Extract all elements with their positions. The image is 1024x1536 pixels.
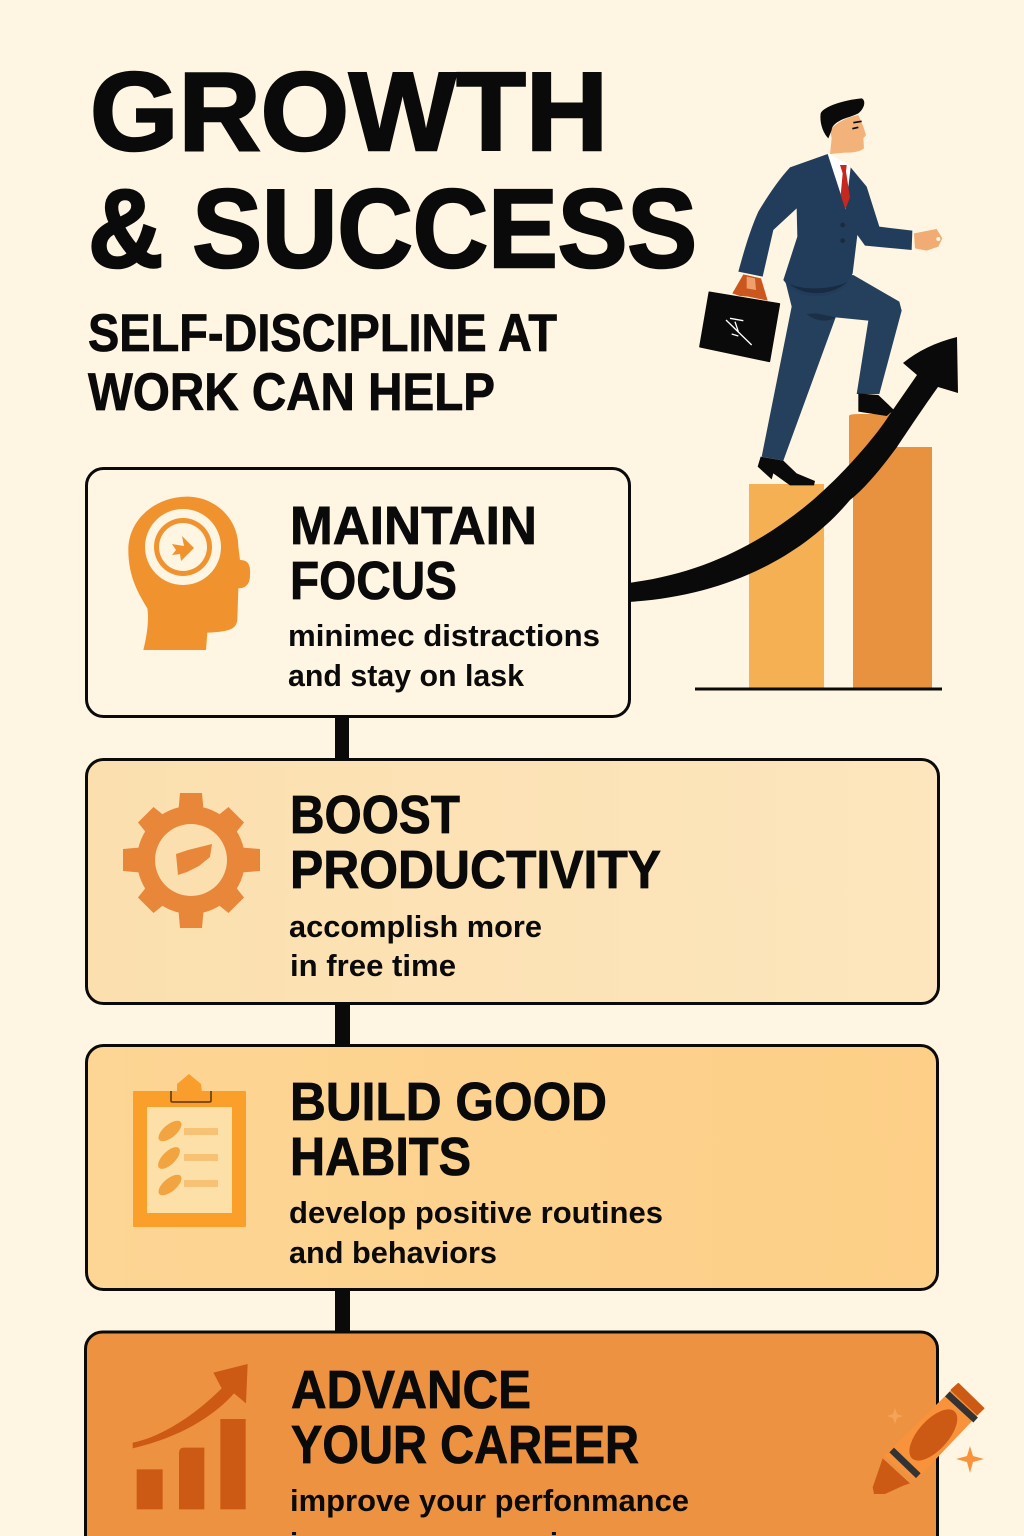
man: legs <box>762 275 902 461</box>
heading: YOUR CAREER <box>291 1415 639 1475</box>
heading: HABITS <box>290 1127 471 1187</box>
man: hand on briefcase <box>732 274 768 301</box>
panel: maintain focus <box>86 468 630 716</box>
icon: gear <box>100 769 282 951</box>
panel: boost productivity <box>86 760 938 1004</box>
description <box>289 1195 663 1270</box>
description: in free time <box>290 948 456 983</box>
illustration: businessman climbing <box>700 98 942 485</box>
description <box>289 909 542 983</box>
title: GROWTH <box>90 50 608 174</box>
heading <box>290 785 661 900</box>
man: hair <box>820 98 864 138</box>
connector lines between panels <box>335 715 350 1333</box>
icon: crayon with sparkles <box>873 1384 984 1494</box>
heading: MAINTAIN <box>290 496 537 556</box>
description: accomplish more <box>289 909 542 944</box>
panel: advance your career <box>86 1332 938 1536</box>
description: and behaviors <box>289 1235 497 1270</box>
panel: build good habits <box>86 1046 938 1290</box>
heading <box>290 1072 607 1187</box>
heading: ADVANCE <box>291 1360 531 1420</box>
man: face <box>830 115 866 154</box>
crayon body <box>873 1384 983 1494</box>
description: and stay on lask <box>288 658 525 693</box>
icon: head with target <box>128 497 250 650</box>
description <box>288 618 600 693</box>
man: shoes <box>758 393 894 485</box>
description: improve your perfonmance <box>290 1483 689 1518</box>
description: minimec distractions <box>288 618 600 653</box>
man: shirt <box>828 153 852 210</box>
icon: clipboard checklist <box>133 1074 246 1227</box>
heading: BOOST <box>290 785 460 845</box>
icon: bar chart with arrow <box>133 1364 248 1509</box>
title: & SUCCESS <box>88 167 697 291</box>
sparkle <box>956 1446 984 1473</box>
heading <box>290 496 537 611</box>
heading <box>291 1360 639 1475</box>
briefcase <box>700 292 779 361</box>
description <box>290 1483 689 1536</box>
subtitle: SELF-DISCIPLINE AT <box>88 304 557 363</box>
subtitle: WORK CAN HELP <box>88 363 495 422</box>
subtitle <box>88 304 557 422</box>
heading: BUILD GOOD <box>290 1072 607 1132</box>
man: fist <box>914 229 942 251</box>
heading: PRODUCTIVITY <box>290 840 661 900</box>
chart: rising bars under the climber <box>695 414 942 690</box>
man: tie <box>840 165 850 209</box>
man: jacket <box>738 154 912 296</box>
heading: FOCUS <box>290 551 457 611</box>
growth arrow <box>628 337 958 602</box>
title <box>88 50 697 291</box>
description: develop positive routines <box>289 1195 663 1230</box>
